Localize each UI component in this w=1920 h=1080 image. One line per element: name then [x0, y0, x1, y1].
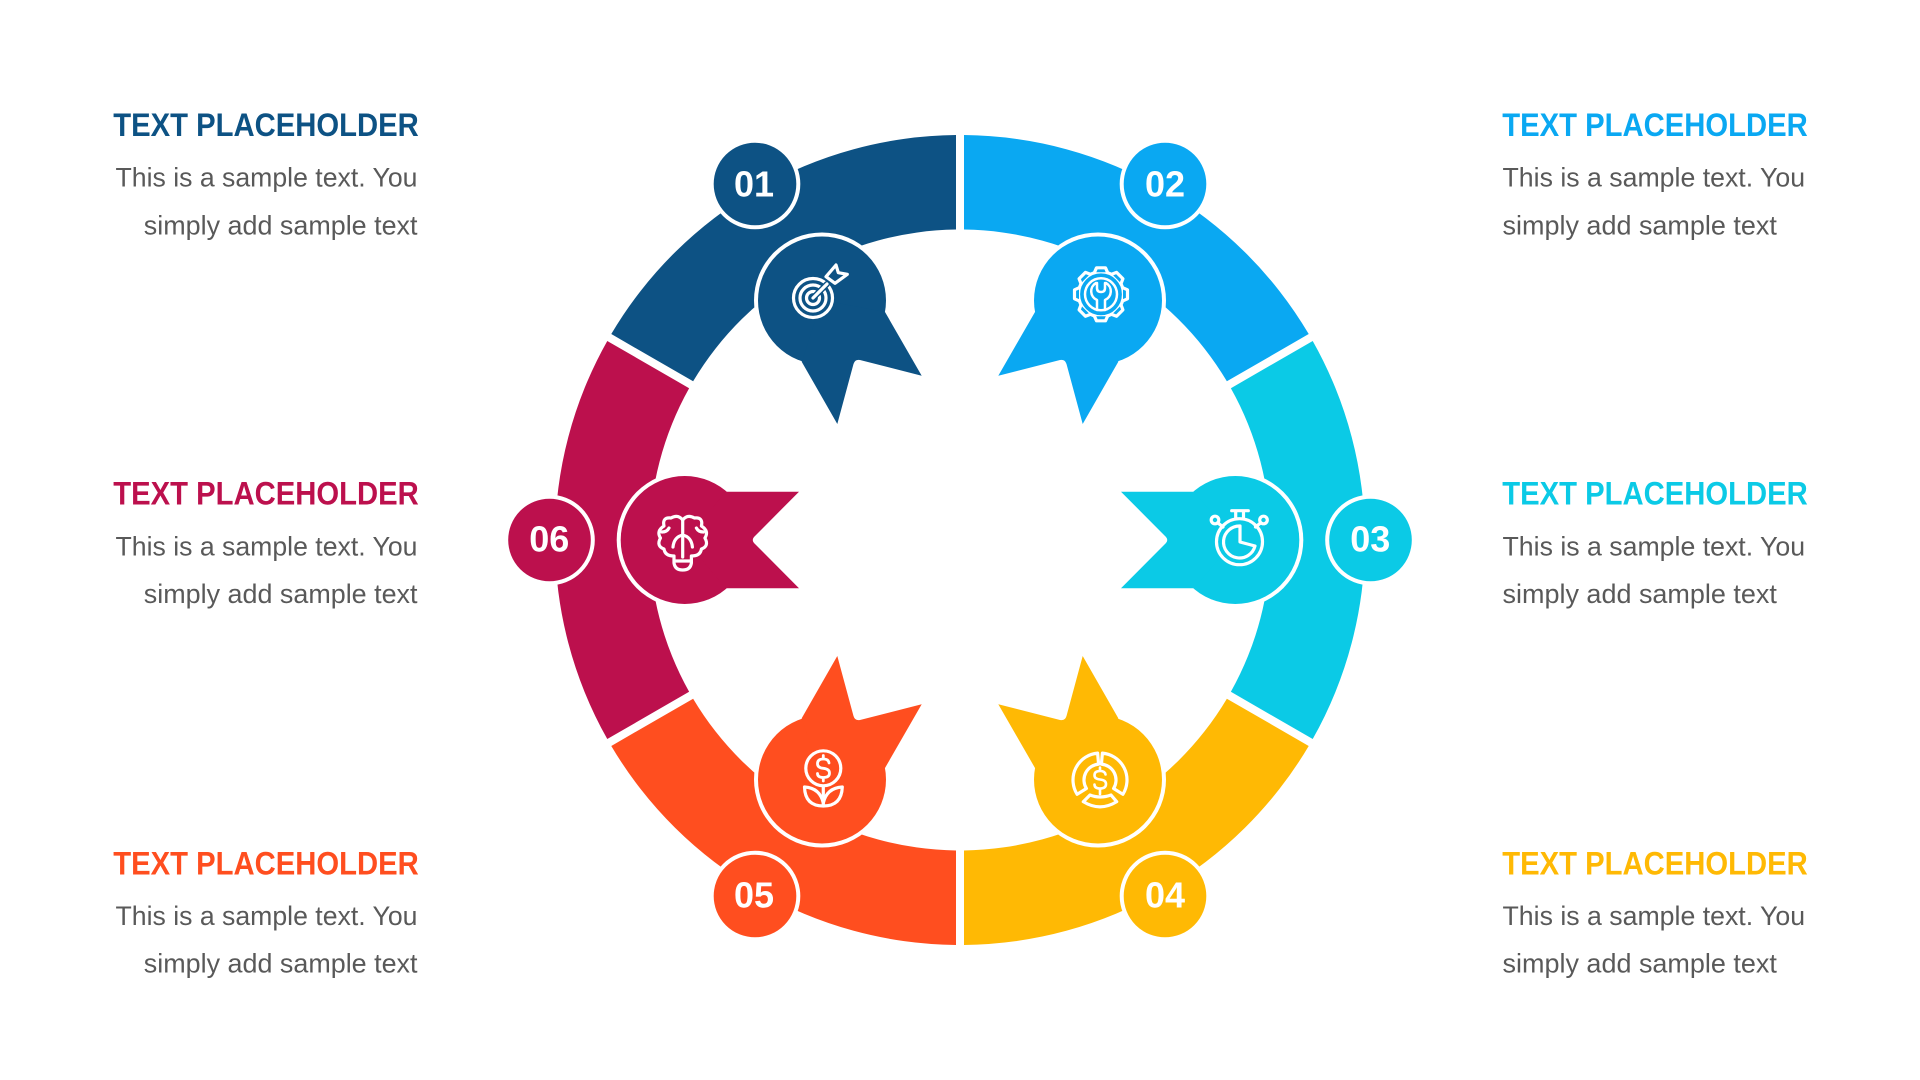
heading 01: TEXT PLACEHOLDER	[113, 107, 419, 143]
heading 05: TEXT PLACEHOLDER	[113, 845, 419, 881]
step 02 segment group	[964, 135, 1309, 424]
heading 04: TEXT PLACEHOLDER	[1502, 845, 1808, 881]
pointer 03	[1121, 472, 1303, 608]
number badge 05: 05	[734, 875, 774, 916]
body 02: This is a sample text. You	[1502, 163, 1805, 193]
number badge 06: 06	[529, 519, 569, 560]
number badge 04	[1122, 853, 1208, 939]
heading 06: TEXT PLACEHOLDER	[113, 476, 419, 512]
body 06: simply add sample text	[144, 579, 418, 609]
ring segment 06	[555, 341, 689, 739]
step 04 segment group	[964, 656, 1309, 945]
pointer 06	[617, 472, 799, 608]
icon: stopwatch	[1211, 511, 1267, 565]
step 01 segment group	[611, 135, 956, 424]
ring segment 04	[964, 699, 1309, 945]
ring segment 02	[964, 135, 1309, 381]
icon: target with arrow	[794, 265, 847, 318]
body 04: This is a sample text. You	[1502, 901, 1805, 931]
number badge 05	[712, 853, 798, 939]
ring segment 05	[611, 699, 956, 945]
icon: dollar pie chart	[1073, 753, 1127, 807]
body 02: simply add sample text	[1502, 210, 1777, 240]
body 06	[116, 531, 418, 609]
body 03: This is a sample text. You	[1502, 531, 1805, 561]
ring segment 01	[611, 135, 956, 381]
icon: gear with wrench	[1074, 268, 1128, 321]
body 06: This is a sample text. You	[116, 531, 418, 561]
body 01	[116, 163, 418, 240]
pointer 01	[754, 232, 922, 424]
number badge 01: 01	[734, 164, 774, 205]
text block 05	[113, 845, 419, 979]
text block 02	[1502, 107, 1808, 240]
number badge 02: 02	[1145, 164, 1185, 205]
body 02	[1502, 163, 1805, 240]
number badge 01	[712, 141, 798, 227]
number badge 03	[1327, 497, 1414, 583]
body 05	[116, 901, 418, 979]
body 03	[1502, 531, 1805, 609]
number badge 04: 04	[1145, 875, 1185, 916]
heading 02: TEXT PLACEHOLDER	[1502, 107, 1808, 143]
text block 01	[113, 107, 419, 240]
body 05: simply add sample text	[144, 949, 418, 979]
body 04	[1502, 901, 1805, 979]
heading 03: TEXT PLACEHOLDER	[1502, 476, 1808, 512]
step 05 segment group	[611, 656, 956, 945]
text block 03	[1502, 476, 1808, 609]
body 03: simply add sample text	[1502, 579, 1777, 609]
body 01: This is a sample text. You	[116, 163, 418, 193]
text block 04	[1502, 845, 1808, 979]
pointer 05	[754, 656, 922, 848]
number badge 06	[506, 497, 593, 583]
number badge 03: 03	[1350, 519, 1390, 560]
icon: money flower	[804, 751, 842, 806]
step 03 segment group	[1121, 341, 1414, 739]
number badge 02	[1122, 141, 1208, 227]
body 04: simply add sample text	[1502, 949, 1777, 979]
pointer 02	[998, 232, 1166, 424]
pointer 04	[998, 656, 1166, 848]
text block 06	[113, 476, 419, 609]
body 05: This is a sample text. You	[116, 901, 418, 931]
icon: brain bulb	[659, 516, 707, 570]
body 01: simply add sample text	[144, 210, 418, 240]
step 06 segment group	[506, 341, 799, 739]
ring segment 03	[1231, 341, 1365, 739]
